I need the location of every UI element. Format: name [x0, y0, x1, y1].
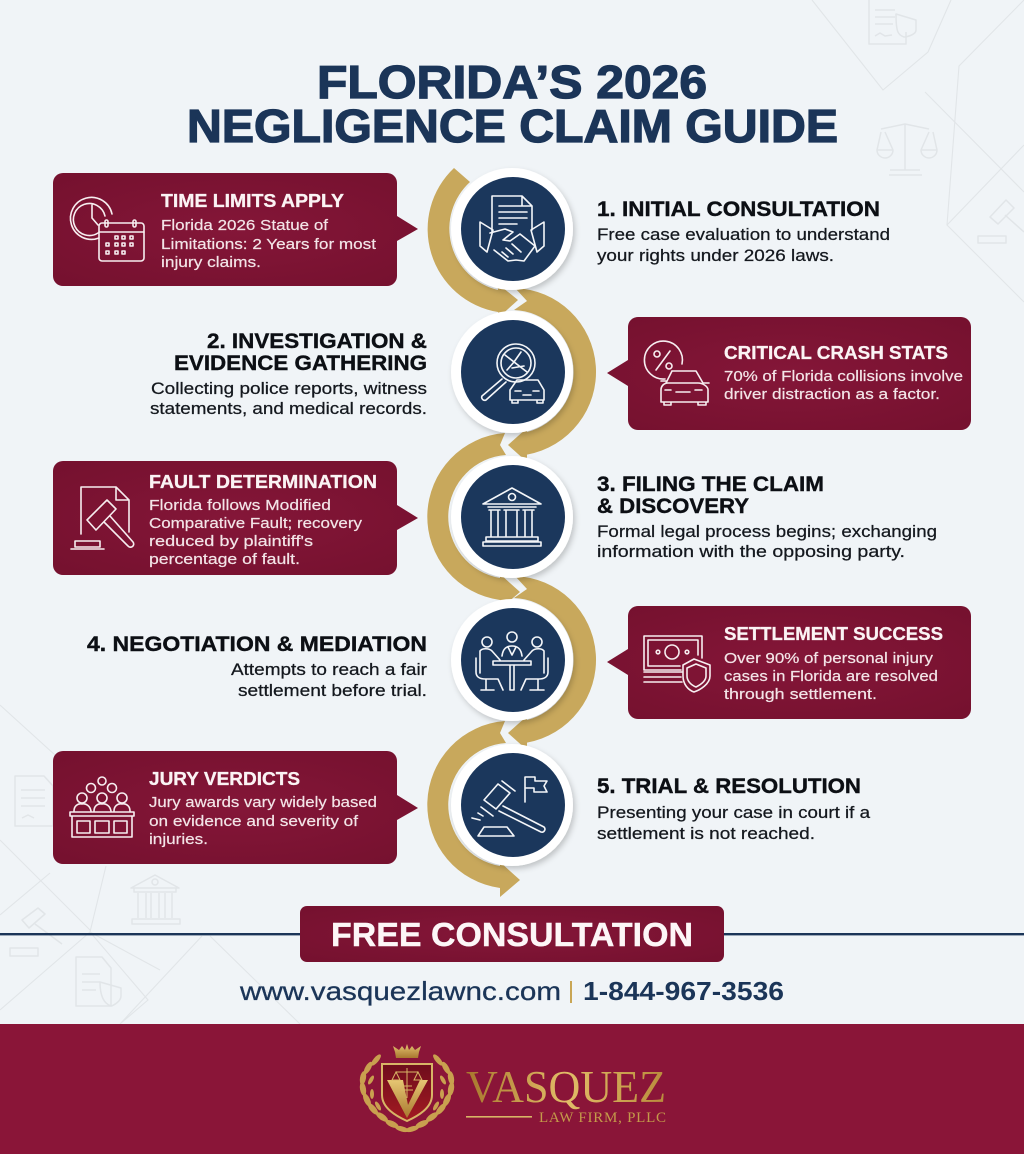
step 2 text: 2. INVESTIGATION & — [207, 329, 427, 353]
contact line: 1-844-967-3536 — [583, 976, 784, 1006]
card: jury verdicts: JURY VERDICTS — [149, 768, 300, 789]
logo wordmark: VASQUEZ — [466, 1061, 666, 1112]
card: jury verdicts: injuries. — [149, 831, 208, 848]
step circle 4: meeting table icon — [451, 599, 573, 721]
card: fault determination: reduced by plaintiff's — [149, 533, 313, 550]
step 4 text: settlement before trial. — [238, 682, 427, 700]
divider line — [0, 933, 1024, 935]
step 4 text: Attempts to reach a fair — [231, 661, 428, 679]
logo wreath — [359, 1053, 455, 1133]
step 3 text: Formal legal process begins; exchanging — [597, 523, 937, 541]
card: time limits apply: injury claims. — [161, 254, 261, 271]
card: time limits apply: TIME LIMITS APPLY — [161, 190, 345, 211]
card: time limits apply — [53, 173, 418, 286]
step 1 text: 1. INITIAL CONSULTATION — [597, 197, 880, 221]
card: jury verdicts — [53, 751, 418, 864]
card: jury verdicts: Jury awards vary widely based — [149, 794, 377, 811]
decorative icon: scales — [877, 124, 937, 175]
logo crown — [393, 1044, 421, 1058]
card: settlement success: through settlement. — [724, 686, 877, 703]
decorative icon: document with shield — [869, 0, 916, 44]
step 1 text — [597, 197, 890, 265]
card: critical crash stats: driver distraction as a factor. — [724, 386, 940, 403]
footer band — [0, 1024, 1024, 1154]
title: NEGLIGENCE CLAIM GUIDE — [187, 100, 838, 152]
logo shield — [382, 1064, 432, 1121]
step circle 5: gavel and flag icon — [451, 744, 573, 866]
step 5 text: 5. TRIAL & RESOLUTION — [597, 774, 861, 798]
decorative icon: gavel lower left — [10, 908, 62, 956]
icon: clock and calendar — [70, 197, 144, 261]
gold ribbon — [427, 168, 596, 897]
decorative icon: document shield lower left — [76, 957, 121, 1006]
card: fault determination: FAULT DETERMINATION — [149, 471, 377, 492]
card: critical crash stats: CRITICAL CRASH STATS — [724, 342, 948, 363]
card: time limits apply: Florida 2026 Statue of — [161, 217, 329, 234]
contact line: www.vasquezlawnc.com — [239, 976, 561, 1006]
step 1 text: Free case evaluation to understand — [597, 226, 890, 244]
card: settlement success: Over 90% of personal injury — [724, 650, 934, 667]
card: fault determination: Florida follows Modified — [149, 497, 331, 514]
step circle 3: courthouse icon — [451, 456, 573, 578]
decorative icon: document left — [15, 776, 53, 826]
decorative icon: gavel — [978, 200, 1024, 243]
logo V mark — [387, 1080, 428, 1118]
card: fault determination: percentage of fault. — [149, 551, 300, 568]
step 2 text — [150, 329, 427, 418]
card: settlement success — [607, 606, 971, 719]
icon: percent and car — [644, 341, 709, 405]
logo — [359, 1044, 666, 1133]
step 3 text: information with the opposing party. — [597, 543, 905, 561]
icon: money and shield — [644, 636, 710, 692]
card: critical crash stats — [607, 317, 971, 430]
card: critical crash stats: 70% of Florida collisions involve — [724, 368, 963, 385]
step 4 text — [87, 632, 428, 700]
step 4 text: 4. NEGOTIATION & MEDIATION — [87, 632, 427, 656]
title: FLORIDA’S 2026 — [317, 56, 707, 108]
card: time limits apply: Limitations: 2 Years for most — [161, 236, 377, 253]
step 2 text: EVIDENCE GATHERING — [174, 351, 427, 375]
logo: LAW FIRM, PLLC — [539, 1110, 666, 1126]
call to action button — [300, 906, 724, 962]
step 3 text: 3. FILING THE CLAIM — [597, 472, 824, 496]
step 1 text: your rights under 2026 laws. — [597, 247, 834, 265]
step circle 1: handshake icon — [451, 168, 573, 290]
step 5 text — [597, 774, 871, 843]
icon: document and gavel — [71, 487, 134, 549]
logo scales — [392, 1068, 422, 1098]
card: settlement success: cases in Florida are resolved — [724, 668, 938, 685]
icon: jury box — [70, 777, 134, 837]
card: settlement success: SETTLEMENT SUCCESS — [724, 623, 943, 644]
step 3 text: & DISCOVERY — [597, 494, 749, 518]
contact line — [239, 976, 784, 1006]
card: jury verdicts: on evidence and severity of — [149, 813, 359, 830]
step 3 text — [597, 472, 937, 561]
decorative icon: courthouse — [131, 875, 180, 924]
call to action button: FREE CONSULTATION — [331, 916, 693, 953]
card: fault determination — [53, 461, 418, 575]
title — [187, 56, 838, 152]
step 2 text: Collecting police reports, witness — [151, 380, 427, 398]
step circle 2: magnifier and car icon — [451, 311, 573, 433]
step 2 text: statements, and medical records. — [150, 400, 427, 418]
step 5 text: Presenting your case in court if a — [597, 804, 871, 822]
step 5 text: settlement is not reached. — [597, 825, 815, 843]
card: fault determination: Comparative Fault; recovery — [149, 515, 363, 532]
